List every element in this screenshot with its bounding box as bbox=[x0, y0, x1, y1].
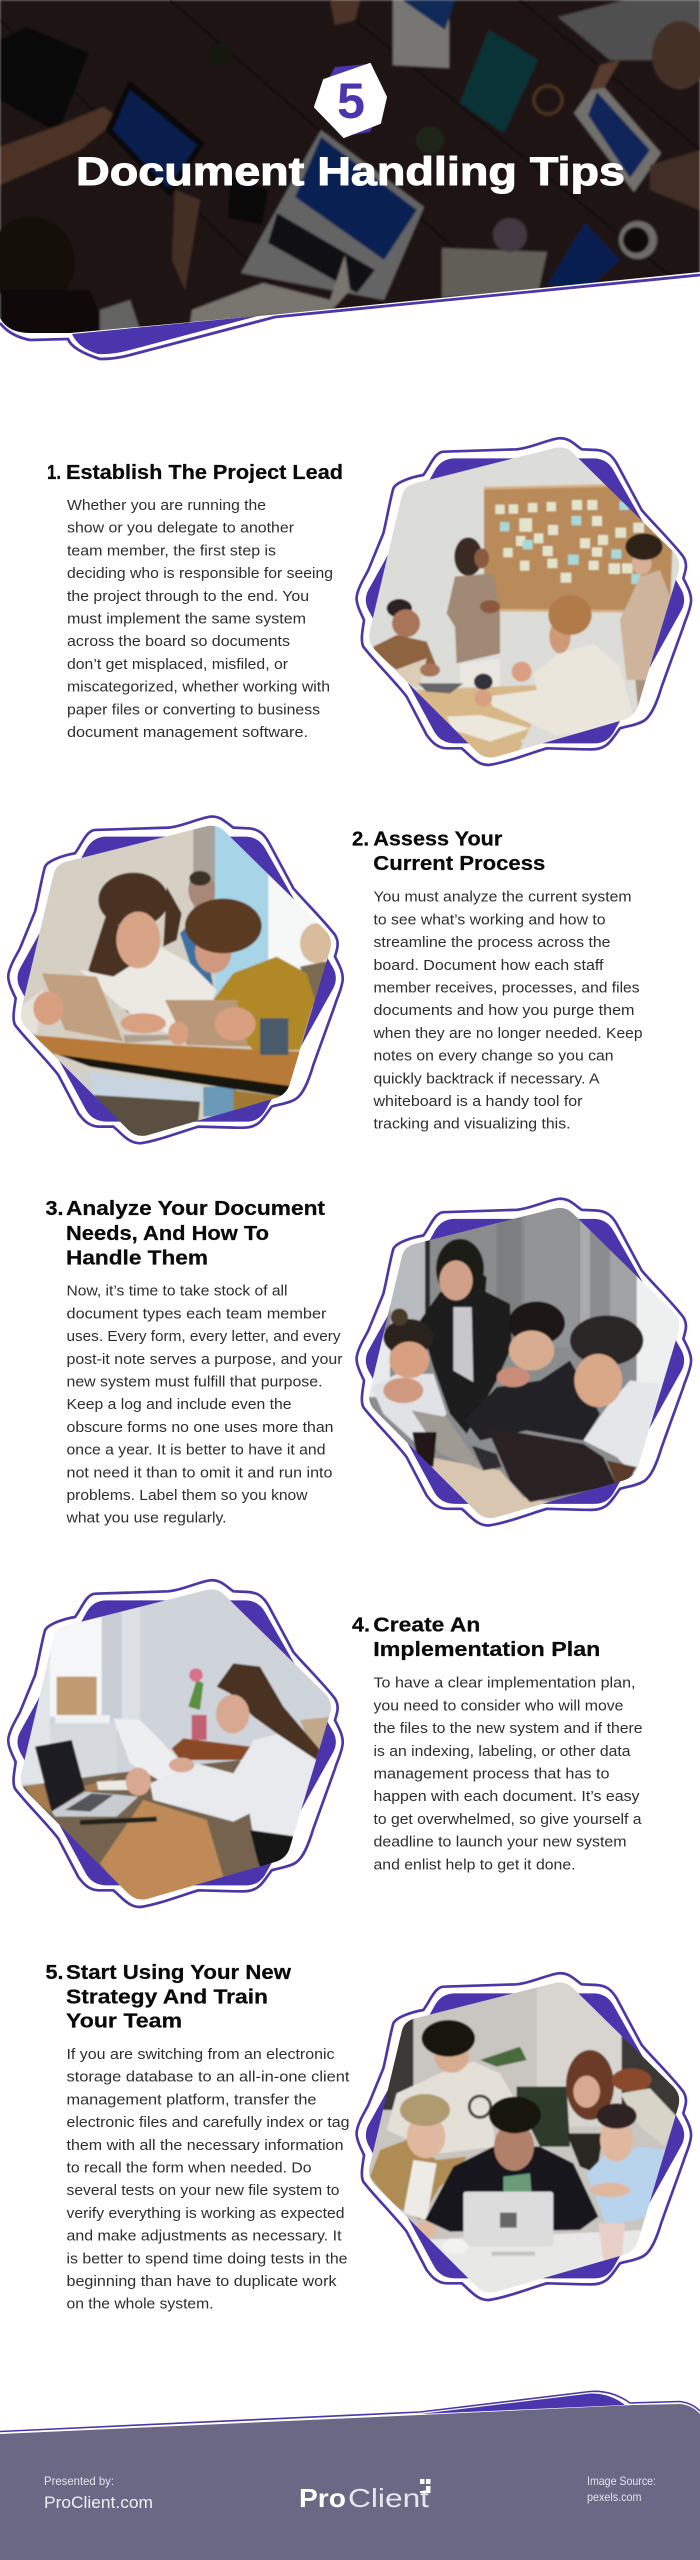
image source: Image Source: bbox=[587, 2474, 656, 2488]
section 5 body text: If you are switching from an electronic bbox=[66, 2046, 335, 2063]
section 2 body text bbox=[372, 889, 642, 1133]
section 1 photo frame: team at cork board bbox=[355, 436, 692, 766]
number badge bbox=[314, 64, 386, 137]
section 2 body text: board. Document how each staff bbox=[374, 957, 604, 974]
section 1 body text: miscategorized, whether working with bbox=[67, 679, 330, 696]
section 1 body text: the project through to the end. You bbox=[67, 588, 309, 605]
section 5 heading: Your Team bbox=[66, 2010, 182, 2033]
section 3 body text: post-it note serves a purpose, and your bbox=[66, 1351, 342, 1368]
section 4 body text: you need to consider who will move bbox=[374, 1697, 624, 1714]
section 4 heading bbox=[352, 1614, 600, 1661]
section 3 heading bbox=[46, 1197, 325, 1269]
section 5 photo frame: group around laptop bbox=[355, 1972, 692, 2302]
section 3 heading: 3. bbox=[46, 1197, 64, 1220]
presented by: Presented by: bbox=[44, 2474, 114, 2488]
section 5 body text: electronic files and carefully index or tag bbox=[66, 2114, 350, 2131]
section 3 body text: not need it than to omit it and run into bbox=[66, 1464, 332, 1481]
section 4 body text: deadline to launch your new system bbox=[374, 1834, 626, 1851]
section 2 heading bbox=[352, 828, 545, 875]
section 5 body text: several tests on your new file system to bbox=[66, 2182, 340, 2199]
section 1 body text: document management software. bbox=[67, 724, 308, 741]
section 3 body text: new system must fulfill that purpose. bbox=[66, 1374, 322, 1390]
section 3 body text: Keep a log and include even the bbox=[66, 1396, 292, 1413]
section 4 body text bbox=[374, 1675, 642, 1873]
footer panel bbox=[0, 2404, 700, 2560]
section 5 body text: to recall the form when needed. Do bbox=[66, 2160, 312, 2176]
header purple accent bbox=[72, 316, 258, 354]
section 4 heading: 4. bbox=[352, 1614, 370, 1637]
section 3 heading: Handle Them bbox=[66, 1246, 208, 1269]
section 3 body text: document types each team member bbox=[66, 1305, 326, 1322]
section 2 heading: 2. bbox=[352, 828, 369, 851]
section 2 body text: when they are no longer needed. Keep bbox=[372, 1025, 642, 1042]
section 2 body text: You must analyze the current system bbox=[374, 889, 632, 906]
section 4 body text: to get overwhelmed, so give yourself a bbox=[374, 1811, 642, 1828]
header outline wave bbox=[0, 275, 700, 359]
section 1 body text: deciding who is responsible for seeing bbox=[67, 565, 333, 582]
footer outline wave bbox=[0, 2391, 700, 2432]
section 1 body text: must implement the same system bbox=[67, 610, 306, 628]
section 5 body text: management platform, transfer the bbox=[66, 2091, 316, 2108]
section 2 body text: tracking and visualizing this. bbox=[374, 1116, 570, 1133]
title: Document Handling Tips bbox=[76, 150, 625, 194]
section 5 heading: Start Using Your New bbox=[66, 1961, 291, 1984]
section 3 body text: obscure forms no one uses more than bbox=[66, 1419, 334, 1436]
logo: Client bbox=[348, 2483, 430, 2513]
section 5 body text: beginning than have to duplicate work bbox=[66, 2273, 337, 2290]
section 1 body text: across the board so documents bbox=[67, 633, 290, 650]
section 5 body text: storage database to an all-in-one client bbox=[66, 2069, 350, 2086]
section 2 body text: notes on every change so you can bbox=[374, 1048, 614, 1065]
section 3 body text: once a year. It is better to have it and bbox=[66, 1442, 326, 1459]
section 5 heading: 5. bbox=[46, 1961, 64, 1984]
section 3 body text: problems. Label them so you know bbox=[66, 1487, 308, 1504]
section 5 heading bbox=[46, 1961, 291, 2033]
section 4 body text: is an indexing, labeling, or other data bbox=[374, 1743, 631, 1760]
image source bbox=[587, 2474, 656, 2504]
section 2 heading: Assess Your bbox=[373, 828, 502, 851]
footer purple accent bbox=[420, 2393, 625, 2414]
header banner bbox=[0, 0, 700, 359]
section 4 body text: happen with each document. It’s easy bbox=[374, 1788, 640, 1805]
number badge: 5 bbox=[337, 73, 365, 129]
header photo: overhead office desk bbox=[0, 0, 700, 340]
section 5 body text: them with all the necessary information bbox=[66, 2137, 344, 2154]
section 1 heading: 1. bbox=[47, 461, 61, 484]
section 2 photo frame: two students with laptop and tablet bbox=[6, 815, 344, 1145]
section 5 heading: Strategy And Train bbox=[66, 1985, 268, 2008]
section 2 body text: streamline the process across the bbox=[374, 934, 610, 951]
section 3 body text: Now, it’s time to take stock of all bbox=[66, 1283, 288, 1300]
section 4 body text: management process that has to bbox=[374, 1766, 610, 1782]
section 1 body text: team member, the first step is bbox=[67, 542, 276, 559]
section 5 body text: verify everything is working as expected bbox=[66, 2205, 344, 2222]
section 4 heading: Implementation Plan bbox=[373, 1638, 600, 1661]
section 3 heading: Needs, And How To bbox=[66, 1222, 269, 1245]
section 2 body text: member receives, processes, and files bbox=[374, 980, 640, 996]
presented by bbox=[44, 2474, 153, 2512]
section 2 body text: documents and how you purge them bbox=[374, 1002, 634, 1019]
section 5 body text: is better to spend time doing tests in the bbox=[66, 2250, 348, 2267]
section 1 body text: show or you delegate to another bbox=[67, 520, 294, 537]
section 4 body text: and enlist help to get it done. bbox=[374, 1856, 576, 1873]
section 2 body text: whiteboard is a handy tool for bbox=[372, 1093, 583, 1110]
section 4 body text: the files to the new system and if there bbox=[374, 1720, 642, 1737]
section 1 body text: paper files or converting to business bbox=[67, 701, 320, 718]
section 4 heading: Create An bbox=[373, 1614, 480, 1637]
logo: Pro bbox=[299, 2483, 346, 2513]
section 4 photo frame: woman reviewing documents at desk bbox=[6, 1578, 344, 1908]
section 3 body text bbox=[65, 1283, 343, 1527]
section 1 body text: Whether you are running the bbox=[67, 497, 266, 514]
presented by: ProClient.com bbox=[44, 2493, 153, 2512]
section 1 body text: don’t get misplaced, misfiled, or bbox=[67, 656, 288, 673]
section 3 body text: uses. Every form, every letter, and every bbox=[66, 1328, 341, 1345]
section 3 body text: what you use regularly. bbox=[65, 1510, 227, 1527]
footer bbox=[0, 2391, 700, 2560]
section 2 body text: quickly backtrack if necessary. A bbox=[374, 1070, 600, 1087]
section 5 body text: and make adjustments as necessary. It bbox=[66, 2228, 342, 2245]
section 1 heading: Establish The Project Lead bbox=[66, 461, 343, 484]
section 3 heading: Analyze Your Document bbox=[66, 1197, 325, 1220]
section 5 body text bbox=[66, 2046, 350, 2313]
image source: pexels.com bbox=[587, 2490, 642, 2504]
logo bbox=[299, 2479, 430, 2513]
section 2 heading: Current Process bbox=[373, 852, 545, 875]
section 1 body text bbox=[67, 497, 333, 741]
section 3 photo frame: colleagues around laptops bbox=[355, 1197, 692, 1527]
section 2 body text: to see what’s working and how to bbox=[374, 911, 606, 928]
section 5 body text: on the whole system. bbox=[66, 2296, 214, 2313]
section 4 body text: To have a clear implementation plan, bbox=[374, 1675, 636, 1692]
